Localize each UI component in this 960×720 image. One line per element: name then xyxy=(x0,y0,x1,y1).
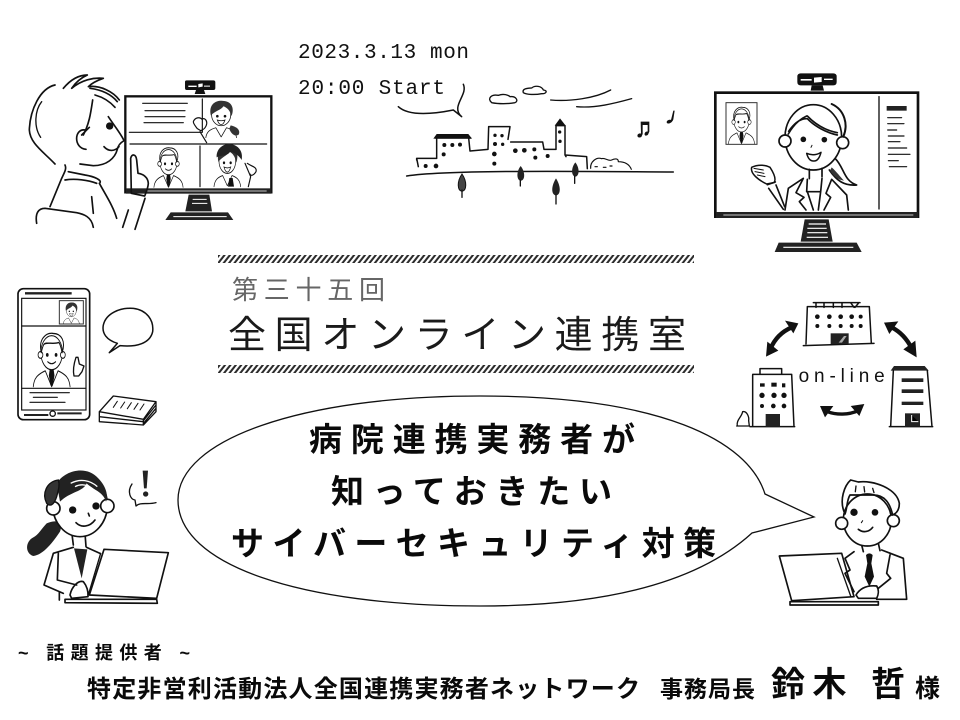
exclamation xyxy=(129,471,156,506)
illustration: townscape with speech line and music notes xyxy=(398,84,675,204)
subtitle: 第三十五回 xyxy=(232,275,385,305)
start time: 20:00 Start xyxy=(298,78,445,101)
webcam xyxy=(797,73,837,85)
ponytail xyxy=(27,521,61,556)
music notes xyxy=(637,111,675,138)
man on screen left xyxy=(154,148,183,187)
body xyxy=(44,532,100,600)
buildings xyxy=(417,126,587,169)
right building xyxy=(889,366,933,427)
wind lines xyxy=(551,90,632,107)
job title: 事務局長 xyxy=(660,676,755,702)
man head xyxy=(29,75,124,166)
top building xyxy=(803,303,874,346)
speech line xyxy=(398,84,464,117)
hatched line top xyxy=(218,255,694,263)
illustration: town network buildings online xyxy=(737,303,933,427)
illustration: woman presenting on monitor xyxy=(715,73,918,252)
man on screen right xyxy=(214,144,256,187)
woman xyxy=(751,104,857,210)
woman on screen xyxy=(193,101,239,143)
date and time xyxy=(298,42,469,101)
speech bubble large xyxy=(178,396,814,606)
books xyxy=(99,396,156,425)
sidebar xyxy=(879,97,910,209)
monitor xyxy=(715,93,918,217)
arrow right xyxy=(884,321,917,357)
head xyxy=(45,470,114,537)
laptop xyxy=(65,549,168,603)
online label: on-line xyxy=(799,366,885,387)
illustration: smartphone video call xyxy=(18,289,156,425)
line 3: サイバーセキュリティ対策 xyxy=(231,525,716,562)
arrow left xyxy=(766,321,798,357)
hatched line bottom xyxy=(218,365,694,373)
body xyxy=(845,543,907,599)
honorific: 様 xyxy=(915,675,940,703)
organization: 特定非営利活動法人全国連携実務者ネットワーク xyxy=(87,676,640,703)
section label: ~ 話題提供者 ~ xyxy=(18,642,190,663)
bubble text xyxy=(231,421,716,562)
line 1: 病院連携実務者が xyxy=(309,421,635,458)
main title: 全国オンライン連携室 xyxy=(228,315,686,357)
name: 鈴木 哲 xyxy=(771,666,905,704)
illustration: man at laptop xyxy=(779,480,907,605)
head xyxy=(836,480,899,546)
trees xyxy=(458,162,579,204)
man body xyxy=(36,165,145,229)
ground xyxy=(407,171,673,176)
presenter label xyxy=(18,642,940,704)
line 2: 知っておきたい xyxy=(331,473,612,510)
clouds xyxy=(490,86,546,104)
monitor xyxy=(125,80,271,220)
inset portrait xyxy=(726,103,757,144)
pointing hand xyxy=(131,155,148,196)
bush xyxy=(591,158,631,169)
phone xyxy=(18,289,90,420)
speech bubble small xyxy=(103,308,153,353)
left building xyxy=(737,369,795,427)
arrow bottom xyxy=(820,404,864,417)
date: 2023.3.13 mon xyxy=(298,42,469,65)
laptop xyxy=(779,553,878,605)
illustration: man pointing at video call monitor xyxy=(29,75,271,229)
illustration: woman at laptop xyxy=(27,470,168,603)
title block xyxy=(218,255,694,373)
